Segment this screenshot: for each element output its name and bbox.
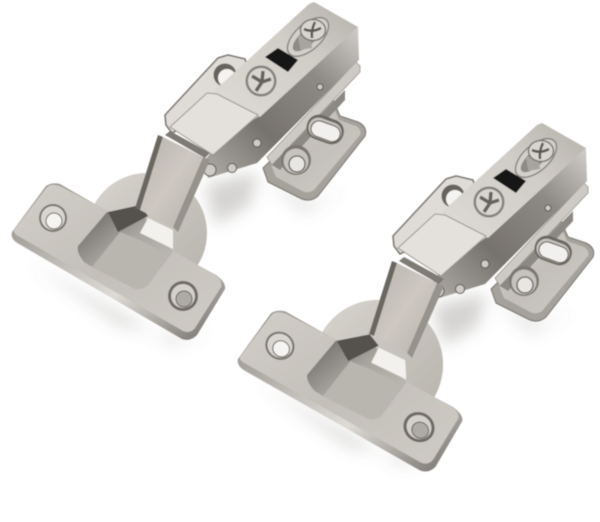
rail — [272, 90, 345, 170]
shadow: hinge cast shadow — [30, 172, 345, 345]
base plate: front — [12, 183, 225, 340]
round hole — [281, 145, 311, 175]
link strap — [135, 131, 210, 232]
arm assembly — [170, 2, 359, 178]
link strap: lower right hinge — [369, 257, 444, 358]
hinge lower right: rear mounting plate — [258, 176, 594, 466]
mounting screw — [246, 66, 276, 96]
cup recess — [78, 212, 173, 289]
arm top — [213, 2, 358, 117]
screw hole right — [168, 281, 198, 311]
slot hole — [303, 111, 347, 148]
arm side — [205, 27, 359, 178]
hinge upper left: shadow and rear mounting plate — [30, 55, 366, 345]
cup opening — [140, 218, 173, 249]
mounting plate: upper wing — [165, 55, 250, 133]
adjustment window — [265, 48, 298, 72]
disc: lower right hinge cup — [313, 300, 443, 429]
base plate: lower right hinge — [235, 310, 465, 472]
mounting plate: rear base — [263, 62, 366, 200]
adjustment screw — [281, 11, 335, 63]
arm assembly: lower right hinge — [398, 123, 587, 299]
rivets — [204, 84, 323, 176]
front block — [170, 93, 258, 155]
screw hole left — [39, 204, 67, 232]
disc: hinge cup — [87, 173, 207, 293]
